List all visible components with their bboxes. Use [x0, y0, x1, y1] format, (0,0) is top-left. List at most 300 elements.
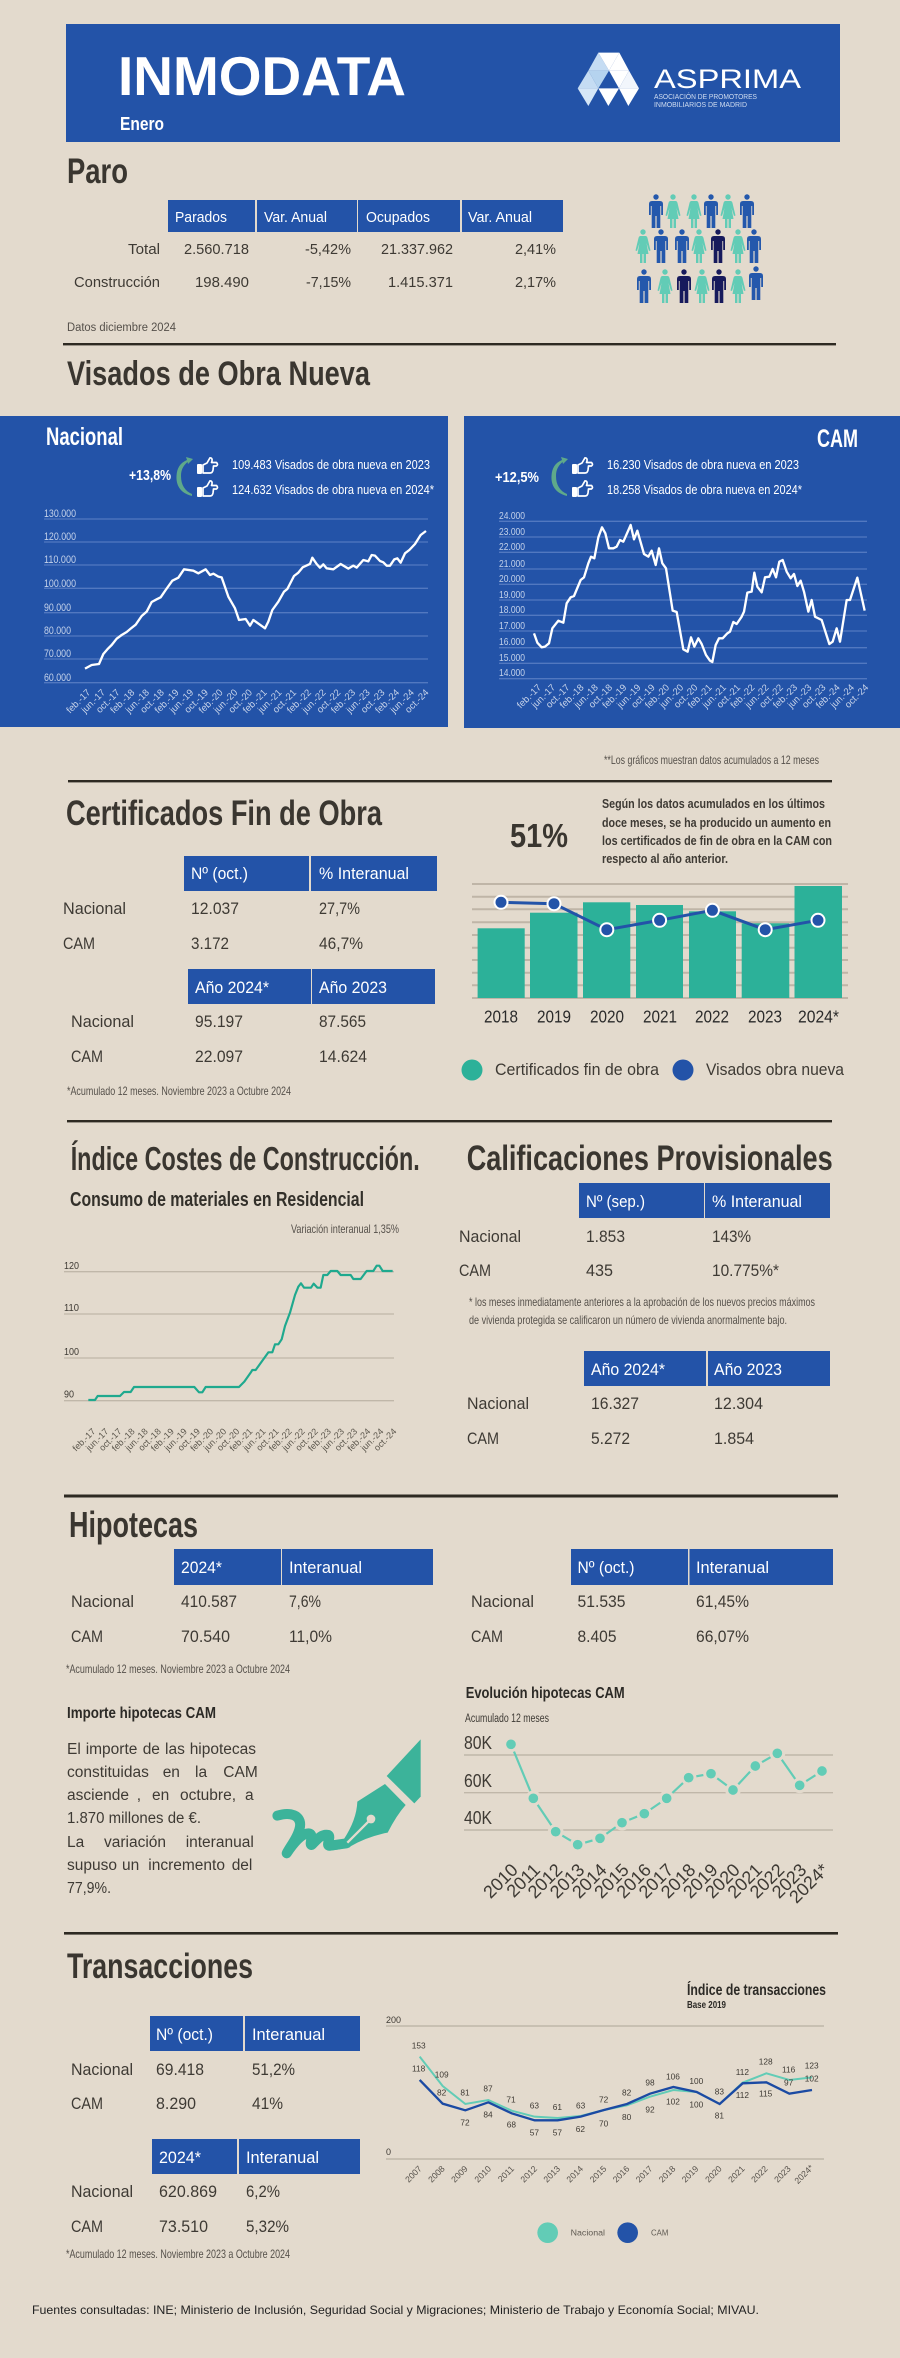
line chart: evolucion hipotecas: 2015 — [590, 1860, 633, 1902]
line chart: evolucion hipotecas: 40K — [464, 1808, 492, 1828]
line chart: visados CAM: 20.000 — [499, 573, 525, 585]
line chart: costes: oct.-22 — [293, 1426, 320, 1453]
table: hipotecas acumulado: 11,0% — [289, 1627, 332, 1646]
line chart: evolucion hipotecas: 2018 — [657, 1860, 699, 1902]
line chart: visados CAM: oct.-18 — [587, 682, 615, 711]
line chart: indice de transacciones: 2021 — [726, 2164, 747, 2184]
line chart: indice de transacciones: 61 — [553, 2102, 562, 2112]
text block: importe: La — [67, 1834, 85, 1851]
line chart: visados nacional: feb.-23 — [329, 687, 358, 716]
line chart: indice de transacciones: 100 — [689, 2099, 704, 2109]
line chart: visados CAM: oct.-20 — [672, 682, 700, 711]
line chart: costes: jun.-20 — [201, 1426, 228, 1454]
line chart: evolucion hipotecas: 2012 — [524, 1860, 566, 1902]
text block: importe: en — [163, 1764, 180, 1781]
line chart: indice de transacciones: 62 — [576, 2124, 585, 2134]
text block: importe: constituidas — [67, 1764, 149, 1781]
text block: importe: interanual — [186, 1834, 254, 1851]
table: transacciones octubre: Nacional — [71, 2060, 133, 2079]
table: certificados octubre: Nacional — [63, 899, 126, 918]
table: transacciones acumulado: 5,32% — [246, 2217, 289, 2236]
table: certificados octubre: 12.037 — [191, 899, 239, 918]
line chart: evolucion hipotecas: 2023 — [768, 1860, 810, 1902]
note: accumulated: Acumulado 12 meses — [465, 1713, 549, 1725]
line chart: costes: 90 — [64, 1389, 74, 1401]
table: calificaciones septiembre: Nacional — [459, 1227, 521, 1246]
line chart: indice de transacciones: 80 — [622, 2112, 632, 2122]
line chart: costes: oct.-19 — [176, 1426, 202, 1453]
line chart: visados nacional: jun.-21 — [255, 687, 284, 716]
line chart: indice de transacciones — [386, 2015, 824, 2186]
table: calificaciones anual: 12.304 — [714, 1394, 763, 1413]
logo wordmark: ASPRIMA — [654, 64, 801, 94]
line chart: visados CAM: jun.-24 — [828, 682, 857, 711]
year labels: 2021 — [643, 1007, 677, 1027]
icon: hands — [572, 458, 592, 497]
table: certificados anual — [71, 969, 435, 1066]
line chart: visados CAM: 24.000 — [499, 510, 525, 522]
line chart: indice de transacciones: 2022 — [749, 2164, 770, 2184]
line chart: indice de transacciones: 2015 — [588, 2164, 609, 2184]
table: hipotecas octubre: Nacional — [471, 1592, 534, 1611]
legend: indice de transacciones: CAM — [651, 2228, 668, 2238]
line chart: indice de transacciones: 2012 — [518, 2164, 539, 2184]
table: hipotecas acumulado: 70.540 — [181, 1627, 230, 1646]
subheading: importe hipotecas: Importe hipotecas CAM — [67, 1705, 216, 1722]
line chart: costes: 110 — [64, 1302, 79, 1314]
line chart: visados nacional: feb.-18 — [109, 687, 137, 716]
line chart: indice de transacciones: 2013 — [541, 2164, 562, 2184]
line chart: visados nacional: oct.-18 — [138, 687, 167, 716]
line chart: visados nacional — [44, 508, 431, 716]
line chart: visados CAM: jun.-20 — [657, 682, 686, 711]
table: hipotecas octubre: 51.535 — [578, 1592, 626, 1611]
line chart: visados CAM: oct.-17 — [544, 682, 572, 711]
sources: Fuentes consultadas: INE; Ministerio de Inclusión, Seguridad Social y Migraciones; Ministerio de Trabajo y Economía Social; MIVAU. — [32, 2303, 759, 2317]
line chart: indice de transacciones: 57 — [553, 2128, 562, 2138]
text block: importe: supuso — [67, 1857, 117, 1874]
line chart: costes: oct.-17 — [97, 1426, 124, 1453]
line chart: visados nacional: 110.000 — [44, 554, 76, 566]
line chart: visados nacional: 100.000 — [44, 578, 76, 590]
table: paro: 2,41% — [515, 241, 556, 258]
line chart: indice de transacciones: 82 — [437, 2088, 447, 2098]
line chart: visados CAM: jun.-21 — [700, 682, 729, 711]
line chart: costes: feb.-19 — [149, 1426, 176, 1453]
table: paro: 21.337.962 — [381, 241, 453, 258]
line chart: visados CAM: 14.000 — [499, 667, 525, 679]
line chart: indice de transacciones: 2019 — [680, 2164, 701, 2184]
line chart: visados CAM: jun.-17 — [529, 682, 558, 711]
line chart: indice de transacciones: 0 — [386, 2147, 391, 2157]
text block: importe: incremento — [148, 1857, 225, 1874]
logo tagline: INMOBILIARIOS DE MADRID — [654, 102, 747, 109]
text block: importe: 1.870 millones de €. — [67, 1810, 201, 1827]
table: transacciones octubre: Nº (oct.) — [156, 2025, 213, 2044]
table: transacciones octubre: 51,2% — [252, 2060, 295, 2079]
line chart: indice de transacciones: 81 — [715, 2111, 724, 2121]
line: visados — [494, 896, 824, 936]
table: certificados octubre: 3.172 — [191, 934, 229, 953]
line chart: visados CAM: 15.000 — [499, 652, 525, 664]
table: hipotecas octubre — [471, 1549, 833, 1646]
year labels: 2020 — [590, 1007, 624, 1027]
line chart: indice de transacciones: 118 — [412, 2063, 426, 2073]
heading: Certificados Fin de Obra: Certificados Fin de Obra — [66, 794, 382, 833]
line chart: visados CAM: feb.-18 — [558, 682, 587, 711]
subheading: evolucion hipotecas: Evolución hipotecas CAM — [466, 1685, 625, 1702]
table: paro: -5,42% — [305, 241, 351, 258]
text block: importe: importe — [86, 1741, 137, 1758]
table: certificados octubre: 46,7% — [319, 934, 363, 953]
table: calificaciones septiembre: Nº (sep.) — [586, 1192, 645, 1211]
line chart: indice de transacciones: 100 — [689, 2076, 704, 2086]
line chart: visados CAM: 17.000 — [499, 620, 525, 632]
line chart: indice de transacciones: 63 — [576, 2101, 586, 2111]
logo tagline — [654, 92, 757, 109]
line chart: indice de transacciones: 200 — [386, 2015, 401, 2025]
line chart: costes: feb.-20 — [188, 1426, 215, 1453]
table: paro: 198.490 — [195, 274, 249, 291]
line chart: costes: feb.-17 — [71, 1426, 97, 1453]
line chart: indice de transacciones: 116 — [782, 2065, 796, 2075]
table: certificados anual: 14.624 — [319, 1047, 367, 1066]
table: hipotecas acumulado — [71, 1549, 433, 1646]
panel title: Nacional — [46, 423, 123, 451]
table: certificados octubre — [63, 856, 437, 953]
line chart: visados CAM: oct.-22 — [757, 682, 786, 711]
line chart: evolucion hipotecas: 2011 — [503, 1860, 544, 1901]
table: transacciones acumulado: CAM — [71, 2217, 103, 2236]
line chart: costes: oct.-23 — [333, 1426, 359, 1453]
line chart: evolucion hipotecas: 80K — [464, 1733, 492, 1753]
table: calificaciones anual: 1.854 — [714, 1429, 754, 1448]
line chart: indice de transacciones: 2008 — [426, 2164, 447, 2184]
line chart: indice de transacciones: 2018 — [657, 2164, 678, 2184]
line chart: indice de transacciones: 98 — [645, 2077, 655, 2087]
line chart: visados nacional: 70.000 — [44, 648, 71, 660]
table: transacciones octubre: 8.290 — [156, 2094, 196, 2113]
line chart: visados nacional: 90.000 — [44, 602, 71, 614]
logo tagline: ASOCIACIÓN DE PROMOTORES — [654, 92, 757, 101]
line chart: visados nacional: feb.-19 — [153, 687, 181, 716]
table: paro: Ocupados — [366, 209, 430, 226]
line chart: costes: oct.-24 — [372, 1426, 398, 1453]
heading: Hipotecas: Hipotecas — [69, 1504, 198, 1545]
heading: Paro: Paro — [67, 152, 128, 191]
line chart: indice de transacciones: 84 — [483, 2109, 493, 2119]
line chart: visados CAM: 16.000 — [499, 636, 525, 648]
line chart: indice de transacciones: 128 — [759, 2057, 773, 2067]
line chart: costes — [64, 1260, 398, 1454]
line chart: visados nacional: jun.-24 — [388, 687, 417, 716]
table: paro: 1.415.371 — [388, 274, 453, 291]
chart: certificados y visados — [472, 884, 848, 1027]
table: hipotecas octubre: 66,07% — [696, 1627, 749, 1646]
line chart: visados nacional: feb.-22 — [285, 687, 314, 716]
note: variation: Variación interanual 1,35% — [291, 1222, 399, 1236]
line chart: costes: feb.-22 — [267, 1426, 294, 1453]
line chart: visados nacional: 80.000 — [44, 625, 71, 637]
legend: indice de transacciones: Nacional — [571, 2228, 605, 2238]
big stat 51%: 51% — [510, 817, 568, 854]
line chart: indice de transacciones: 153 — [412, 2040, 426, 2050]
line chart: indice de transacciones: 115 — [759, 2089, 773, 2099]
table: calificaciones anual: 5.272 — [591, 1429, 630, 1448]
line chart: costes: jun.-23 — [319, 1426, 346, 1454]
line chart: costes: 120 — [64, 1260, 79, 1272]
heading: Visados de Obra Nueva: Visados de Obra Nueva — [67, 355, 371, 393]
line chart: indice de transacciones: 2016 — [611, 2164, 632, 2184]
line chart: visados nacional: feb.-20 — [197, 687, 226, 716]
line chart: indice de transacciones: 109 — [435, 2070, 449, 2080]
table: transacciones octubre: 69.418 — [156, 2060, 204, 2079]
line chart: visados CAM: feb.-19 — [601, 682, 629, 711]
table: certificados octubre: Nº (oct.) — [191, 864, 248, 883]
text block: importe: variación — [104, 1834, 166, 1851]
table: paro — [74, 200, 563, 291]
line chart: evolucion hipotecas: 2014 — [568, 1860, 611, 1902]
line chart: visados CAM: jun.-23 — [785, 682, 814, 711]
line chart: visados nacional: oct.-22 — [315, 687, 343, 716]
line chart: visados CAM: feb.-24 — [814, 682, 843, 711]
table: calificaciones septiembre: 1.853 — [586, 1227, 625, 1246]
table: calificaciones septiembre — [459, 1183, 830, 1280]
line chart: visados CAM: feb.-21 — [686, 682, 715, 711]
line chart: indice de transacciones: 57 — [530, 2128, 539, 2138]
line chart: costes: oct.-20 — [215, 1426, 241, 1453]
table: hipotecas acumulado: 7,6% — [289, 1592, 321, 1611]
table: hipotecas acumulado: CAM — [71, 1627, 103, 1646]
table: transacciones acumulado: 620.869 — [159, 2182, 217, 2201]
comparison text: 109.483 Visados de obra nueva en 2023 — [232, 458, 430, 472]
table: calificaciones anual: Año 2024* — [591, 1360, 665, 1379]
line chart: indice de transacciones: 87 — [483, 2084, 493, 2094]
line chart: costes: feb.-24 — [345, 1426, 372, 1453]
line chart: costes: jun.-19 — [162, 1426, 189, 1454]
text block: importe: en — [152, 1787, 169, 1804]
line chart: visados CAM: oct.-19 — [629, 682, 658, 711]
line chart: evolucion hipotecas: 2013 — [546, 1860, 588, 1902]
text block: importe — [67, 1741, 258, 1897]
legend: indice de transacciones — [537, 2222, 668, 2243]
icon: hands — [197, 458, 218, 497]
line chart: costes: oct.-21 — [254, 1426, 281, 1453]
line chart: visados nacional: 130.000 — [44, 508, 76, 520]
note: viviendas protegidas — [469, 1295, 815, 1327]
line chart: costes: jun.-21 — [240, 1426, 268, 1454]
panel: visados nacional — [0, 416, 448, 727]
line chart: evolucion hipotecas: 2024* — [785, 1860, 833, 1907]
explanatory text: doce meses, se ha producido un aumento en — [602, 815, 831, 830]
chart title: indice de transacciones — [687, 1980, 826, 2011]
table: certificados anual: CAM — [71, 1047, 103, 1066]
line chart: visados CAM: 19.000 — [499, 589, 525, 601]
line chart: indice de transacciones: 106 — [666, 2071, 680, 2081]
comparison text — [607, 458, 802, 497]
legend: certificados y visados: Certificados fin de obra — [495, 1060, 659, 1079]
line chart: indice de transacciones: 2023 — [772, 2164, 793, 2184]
panel: visados CAM — [464, 416, 900, 728]
table: calificaciones septiembre: % Interanual — [712, 1192, 802, 1211]
line chart: indice de transacciones: 2009 — [449, 2164, 470, 2184]
table: paro: Total — [128, 241, 160, 258]
heading: Índice Costes: Índice Costes de Construcción. — [71, 1140, 420, 1177]
line chart: visados CAM: jun.-18 — [572, 682, 601, 711]
comparison text — [232, 458, 434, 497]
table: calificaciones anual: CAM — [467, 1429, 499, 1448]
table: transacciones acumulado: Nacional — [71, 2182, 133, 2201]
line chart: visados CAM: feb.-22 — [729, 682, 757, 711]
line chart: indice de transacciones: 2011 — [496, 2164, 516, 2184]
text block: importe: a — [245, 1787, 254, 1804]
bars — [478, 886, 842, 998]
text block: importe: octubre, — [180, 1787, 236, 1804]
line chart: indice de transacciones: 2010 — [472, 2164, 493, 2184]
table: paro: Parados — [175, 209, 227, 226]
line chart: indice de transacciones: 71 — [506, 2094, 516, 2104]
text block: importe: El — [67, 1741, 81, 1758]
footnote: *Acumulado 12 meses. Noviembre 2023 a Octubre 2024 — [67, 1084, 291, 1098]
line chart: visados nacional: 120.000 — [44, 531, 76, 543]
line chart: visados CAM: 18.000 — [499, 604, 525, 616]
table: transacciones octubre: Interanual — [252, 2025, 325, 2044]
table: certificados anual: 95.197 — [195, 1012, 243, 1031]
table: certificados anual: 87.565 — [319, 1012, 366, 1031]
variation percent: +13,8% — [129, 468, 171, 484]
table: certificados octubre: % Interanual — [319, 864, 409, 883]
table: calificaciones anual: 16.327 — [591, 1394, 639, 1413]
table: certificados octubre: CAM — [63, 934, 95, 953]
legend: certificados y visados: Visados obra nueva — [706, 1060, 844, 1079]
line chart: indice de transacciones: 82 — [622, 2088, 632, 2098]
line chart: indice de transacciones: 2024* — [792, 2162, 816, 2186]
year labels: 2024* — [798, 1007, 839, 1027]
line chart: visados nacional: jun.-22 — [299, 687, 329, 716]
table: calificaciones septiembre: 143% — [712, 1227, 751, 1246]
line chart: indice de transacciones: 112 — [736, 2090, 749, 2100]
variation percent: +12,5% — [495, 470, 539, 486]
subtitle month: Enero — [120, 114, 164, 134]
table: paro: Var. Anual — [468, 209, 532, 226]
icon: fountain pen signature — [277, 1739, 421, 1853]
line chart: indice de transacciones: 63 — [530, 2101, 539, 2111]
table: transacciones octubre: 41% — [252, 2094, 283, 2113]
year labels: 2018 — [484, 1007, 518, 1027]
logo mark — [578, 53, 639, 106]
legend: certificados y visados — [462, 1060, 844, 1080]
line chart: indice de transacciones: 72 — [460, 2117, 470, 2127]
table: paro: 2.560.718 — [184, 241, 249, 258]
line chart: visados nacional: oct.-20 — [227, 687, 255, 716]
line chart: evolucion hipotecas — [464, 1733, 833, 1907]
line chart: evolucion hipotecas: 2010 — [479, 1860, 522, 1902]
line chart: visados CAM: 22.000 — [499, 541, 525, 553]
table: calificaciones septiembre: 10.775%* — [712, 1261, 779, 1280]
line chart: indice de transacciones: 97 — [784, 2077, 794, 2087]
table: transacciones acumulado: 2024* — [159, 2148, 201, 2167]
line chart: visados CAM: 23.000 — [499, 526, 525, 538]
line chart: visados nacional: jun.-18 — [123, 687, 152, 716]
line chart: visados CAM: jun.-22 — [742, 682, 772, 711]
table: transacciones acumulado: Interanual — [246, 2148, 319, 2167]
table: certificados anual: Nacional — [71, 1012, 134, 1031]
table: hipotecas acumulado: 410.587 — [181, 1592, 237, 1611]
line chart: indice de transacciones: 123 — [805, 2061, 819, 2071]
text block: importe: un — [122, 1857, 139, 1874]
note: data date: Datos diciembre 2024 — [67, 322, 177, 334]
chart title: indice de transacciones: Base 2019 — [687, 2000, 726, 2011]
line chart: costes: feb.-23 — [306, 1426, 333, 1453]
line chart: indice de transacciones: 70 — [599, 2119, 609, 2129]
line chart: indice de transacciones: 68 — [507, 2120, 516, 2130]
line chart: visados nacional: oct.-24 — [403, 687, 431, 716]
line chart: visados CAM: oct.-24 — [843, 682, 871, 711]
line chart: evolucion hipotecas: 2022 — [746, 1860, 788, 1902]
table: hipotecas octubre: CAM — [471, 1627, 503, 1646]
table: certificados anual: Año 2023 — [319, 978, 387, 997]
line chart: evolucion hipotecas: 2019 — [679, 1860, 722, 1902]
table: calificaciones anual: Año 2023 — [714, 1360, 782, 1379]
table: hipotecas acumulado: 2024* — [181, 1558, 222, 1577]
text block: importe: la — [195, 1764, 207, 1781]
line chart: costes: jun.-22 — [280, 1426, 307, 1454]
line chart: visados nacional: feb.-17 — [64, 687, 93, 716]
line chart: indice de transacciones: 81 — [460, 2088, 470, 2098]
line chart: indice de transacciones: 102 — [666, 2097, 680, 2107]
icon: curved arrow — [176, 457, 193, 496]
line chart: visados CAM — [499, 510, 871, 711]
line chart: costes: 100 — [64, 1346, 79, 1358]
line chart: visados CAM: jun.-19 — [614, 682, 643, 711]
note: accumulated data: **Los gráficos muestran datos acumulados a 12 meses — [604, 753, 819, 767]
explanatory text: Según los datos acumulados en los últimos — [602, 796, 825, 811]
line chart: visados nacional: feb.-24 — [373, 687, 402, 716]
comparison text: 16.230 Visados de obra nueva en 2023 — [607, 458, 799, 472]
table: transacciones acumulado: 6,2% — [246, 2182, 280, 2201]
line chart: indice de transacciones: 102 — [805, 2074, 819, 2084]
note: viviendas protegidas: de vivienda protegida se calificaron un número de vivienda anormalmente bajo. — [469, 1313, 787, 1327]
line chart: evolucion hipotecas: 2021 — [724, 1860, 766, 1902]
explanatory text — [602, 796, 832, 866]
line chart: costes: feb.-18 — [110, 1426, 137, 1453]
line chart: visados nacional: jun.-19 — [167, 687, 196, 716]
table: transacciones acumulado — [71, 2139, 360, 2236]
header banner — [66, 24, 840, 142]
line chart: costes: jun.-18 — [123, 1426, 150, 1454]
subheading: consumo: Consumo de materiales en Residencial — [70, 1189, 364, 1211]
line chart: visados nacional: jun.-17 — [79, 687, 108, 716]
line chart: visados CAM: feb.-23 — [771, 682, 800, 711]
table: calificaciones anual — [467, 1351, 830, 1448]
line chart: costes: jun.-24 — [358, 1426, 385, 1454]
text block: importe: del — [232, 1857, 252, 1874]
line chart: visados nacional: jun.-23 — [344, 687, 373, 716]
line chart: visados CAM: feb.-20 — [643, 682, 672, 711]
table: calificaciones septiembre: 435 — [586, 1261, 613, 1280]
footnote: *Acumulado 12 meses. Noviembre 2023 a Octubre 2024 — [66, 1662, 290, 1676]
table: calificaciones anual: Nacional — [467, 1394, 529, 1413]
icon: curved arrow — [551, 457, 568, 496]
text block: importe: hipotecas — [190, 1741, 256, 1758]
line chart: visados nacional: oct.-19 — [183, 687, 211, 716]
comparison text: 124.632 Visados de obra nueva en 2024* — [232, 483, 434, 497]
line chart: visados CAM: 21.000 — [499, 558, 525, 570]
line chart: costes: oct.-18 — [136, 1426, 163, 1453]
line chart: visados nacional: jun.-20 — [211, 687, 240, 716]
table: paro: Var. Anual — [264, 209, 327, 226]
year labels: 2019 — [537, 1007, 571, 1027]
